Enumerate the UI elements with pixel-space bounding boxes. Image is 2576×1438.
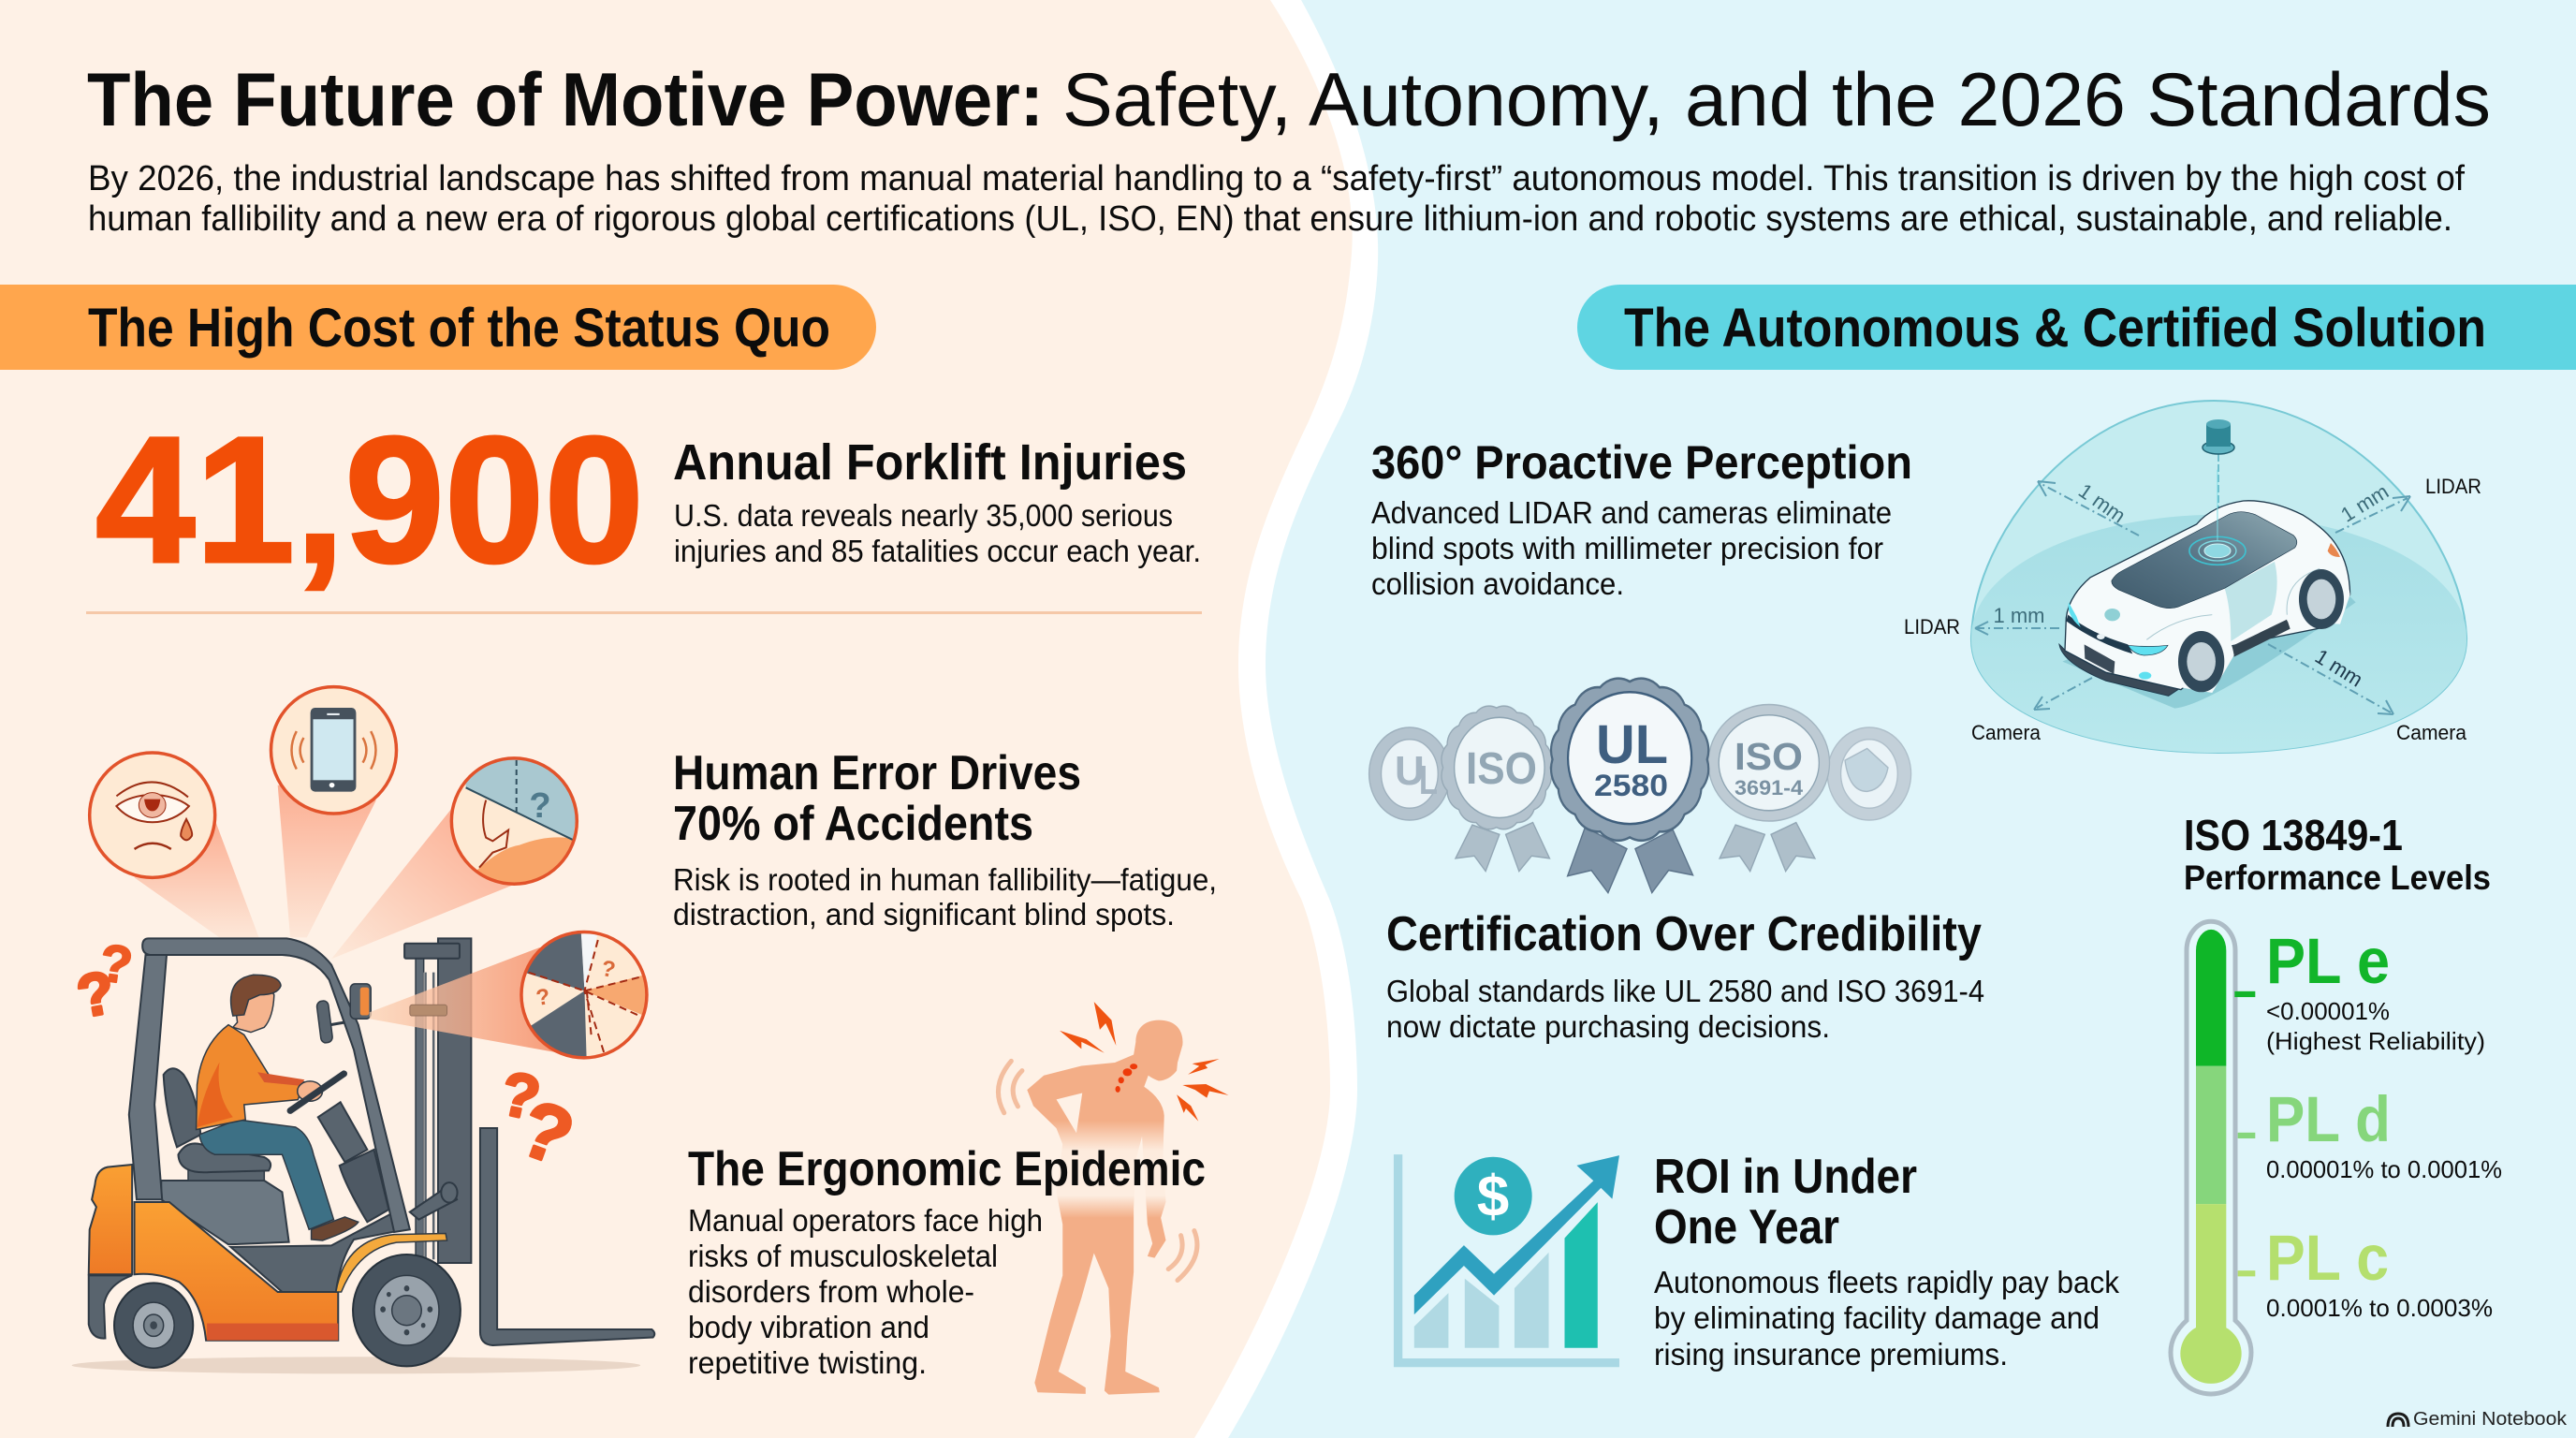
badge labels: U (1395, 748, 1425, 794)
ground disc (1971, 515, 2466, 753)
forklift mast (404, 938, 471, 1263)
PL e: <0.00001% (2266, 997, 2390, 1025)
ergonomic epidemic text: body vibration and (688, 1310, 929, 1344)
360 perception text: Advanced LIDAR and cameras eliminate (1371, 495, 1892, 530)
ROI text: rising insurance premiums. (1654, 1337, 2008, 1372)
distance labels: 1 mm (2311, 644, 2367, 692)
trend arrow (1414, 1155, 1619, 1314)
human error text: 70% of Accidents (673, 797, 1033, 851)
badge labels: ISO (1734, 735, 1803, 778)
section header: solution: The Autonomous & Certified Solution (1624, 298, 2486, 359)
ergonomic epidemic text (688, 1142, 1206, 1380)
question marks: ? (495, 1058, 546, 1133)
mirror blind spot beam (370, 947, 555, 1052)
title: The Future of Motive Power: (87, 58, 1044, 142)
forklift illustration with human-factor callouts (72, 687, 654, 1373)
ergonomic epidemic text: risks of musculoskeletal (688, 1239, 998, 1273)
cab frame (129, 938, 410, 1232)
sensor labels: LIDAR (1904, 615, 1960, 638)
ergonomic epidemic text: repetitive twisting. (688, 1345, 927, 1380)
PL c (2266, 1222, 2493, 1322)
ROI text: One Year (1654, 1200, 1839, 1255)
badge labels: L (1419, 757, 1438, 803)
car (2059, 470, 2356, 709)
forklift body (89, 1165, 458, 1341)
icon: phone distraction (271, 687, 396, 814)
intro paragraph (88, 159, 2465, 239)
human error text: distraction, and significant blind spots. (673, 897, 1175, 932)
ribbons (1456, 823, 1815, 893)
badge labels: UL (1596, 714, 1668, 775)
question marks (72, 786, 617, 1183)
question marks: ? (599, 956, 617, 983)
sensor dome illustration (1904, 401, 2481, 753)
badge labels: 3691-4 (1734, 776, 1804, 800)
distance labels: 1 mm (2074, 478, 2130, 527)
icon: fatigue eye (90, 753, 215, 877)
icon: person with back pain (998, 1002, 1228, 1395)
badge labels (1395, 714, 1804, 803)
distance labels (1994, 478, 2393, 692)
steering (290, 1074, 388, 1222)
badge: far left UL (1369, 727, 1450, 820)
question marks: ? (534, 984, 551, 1011)
level PL c (2180, 1204, 2242, 1384)
PL c: PL c (2266, 1222, 2389, 1294)
ergonomic epidemic text: disorders from whole- (688, 1274, 974, 1309)
certification text: now dictate purchasing decisions. (1386, 1009, 1830, 1044)
PL e: PL e (2266, 925, 2390, 997)
certification text (1386, 907, 1984, 1044)
ROI text: by eliminating facility damage and (1654, 1300, 2100, 1335)
performance levels heading (2184, 811, 2491, 897)
dashed distance arrows (1975, 481, 2410, 714)
sensor labels (1904, 475, 2481, 744)
360 perception text: 360° Proactive Perception (1371, 436, 1912, 489)
intro paragraph: By 2026, the industrial landscape has shifted from manual material handling to a “safety-first” autonomous model. This transition is driven by the high cost of (88, 159, 2465, 198)
mirrors (316, 984, 371, 1044)
360 perception text: collision avoidance. (1371, 566, 1624, 601)
question marks: ? (508, 1083, 584, 1183)
human error text: Risk is rooted in human fallibility—fatigue, (673, 862, 1217, 897)
annual forklift injuries text (673, 434, 1201, 568)
question marks: ? (96, 932, 136, 995)
vibration arcs (998, 1061, 1197, 1281)
annual forklift injuries text: Annual Forklift Injuries (673, 434, 1187, 491)
spine pain dots (1115, 1064, 1137, 1093)
badge: far right seal (1827, 727, 1911, 820)
intro paragraph: human fallibility and a new era of rigorous global certifications (UL, ISO, EN) that ensure lithium-ion and robotic systems are ethical, sustainable, and reliable. (88, 199, 2452, 239)
ergonomic epidemic text: Manual operators face high (688, 1203, 1043, 1238)
PL d (2266, 1083, 2502, 1183)
title (87, 58, 2491, 142)
human error text (673, 746, 1217, 932)
badge: UL 2580 (1551, 679, 1708, 841)
thermometer gauge (2171, 921, 2255, 1394)
axes (1394, 1154, 1619, 1367)
dome (1971, 401, 2466, 753)
icon: side blind spot (451, 756, 582, 890)
badge labels: 2580 (1594, 769, 1668, 802)
distance labels: 1 mm (1994, 604, 2044, 627)
PL d: 0.00001% to 0.0001% (2266, 1155, 2502, 1183)
sensor labels: Camera (2396, 721, 2467, 744)
performance levels heading: ISO 13849-1 (2184, 811, 2403, 859)
certification text: Global standards like UL 2580 and ISO 3691-4 (1386, 974, 1984, 1008)
lidar sensor (2203, 419, 2234, 529)
level PL e (2196, 930, 2226, 1066)
icon: mirror blind spot (520, 931, 649, 1060)
bars (1414, 1202, 1598, 1348)
sensor labels: Camera (1971, 721, 2042, 744)
title: Safety, Autonomy, and the 2026 Standards (1062, 58, 2491, 142)
section header: status quo: The High Cost of the Status Quo (88, 298, 830, 359)
section header: solution (1577, 285, 2576, 370)
human error text: Human Error Drives (673, 746, 1081, 800)
tick marks (2234, 991, 2255, 1276)
360 perception text (1371, 436, 1912, 601)
section header: status quo (0, 285, 876, 370)
PL e (2266, 925, 2485, 1055)
wheels (114, 1255, 461, 1368)
level PL d (2196, 1066, 2226, 1204)
light beams (135, 785, 513, 959)
360 perception text: blind spots with millimeter precision for (1371, 531, 1883, 565)
watermark: Gemini Notebook: Gemini Notebook (2413, 1409, 2568, 1430)
badge: ISO 3691-4 (1708, 705, 1830, 821)
ROI text (1654, 1150, 2119, 1372)
PL d: PL d (2266, 1083, 2391, 1155)
ROI growth chart (1394, 1154, 1619, 1367)
distance labels: 1 mm (2336, 479, 2393, 527)
dollar coin (1455, 1157, 1532, 1235)
ROI text: ROI in Under (1654, 1150, 1917, 1204)
ergonomic epidemic text: The Ergonomic Epidemic (688, 1142, 1206, 1196)
seat (164, 1068, 271, 1181)
certification badges (1369, 679, 1911, 893)
annual forklift injuries text: U.S. data reveals nearly 35,000 serious (674, 498, 1173, 533)
ROI growth chart: $ (1477, 1165, 1509, 1229)
PL e: (Highest Reliability) (2266, 1027, 2485, 1055)
badge labels: ISO (1466, 744, 1537, 794)
pain bolts (1060, 1002, 1228, 1122)
forks (480, 1128, 654, 1345)
ROI text: Autonomous fleets rapidly pay back (1654, 1265, 2119, 1299)
question marks: ? (529, 786, 551, 826)
question marks: ? (72, 958, 120, 1031)
annual forklift injuries text: injuries and 85 fatalities occur each year. (674, 534, 1201, 568)
driver (197, 975, 359, 1240)
sensor labels: LIDAR (2425, 475, 2481, 498)
badge: ISO left (1442, 706, 1551, 829)
PL c: 0.0001% to 0.0003% (2266, 1294, 2493, 1322)
certification text: Certification Over Credibility (1386, 907, 1982, 961)
big stat: 41,900: 41,900 (95, 399, 644, 600)
performance levels heading: Performance Levels (2184, 858, 2491, 897)
